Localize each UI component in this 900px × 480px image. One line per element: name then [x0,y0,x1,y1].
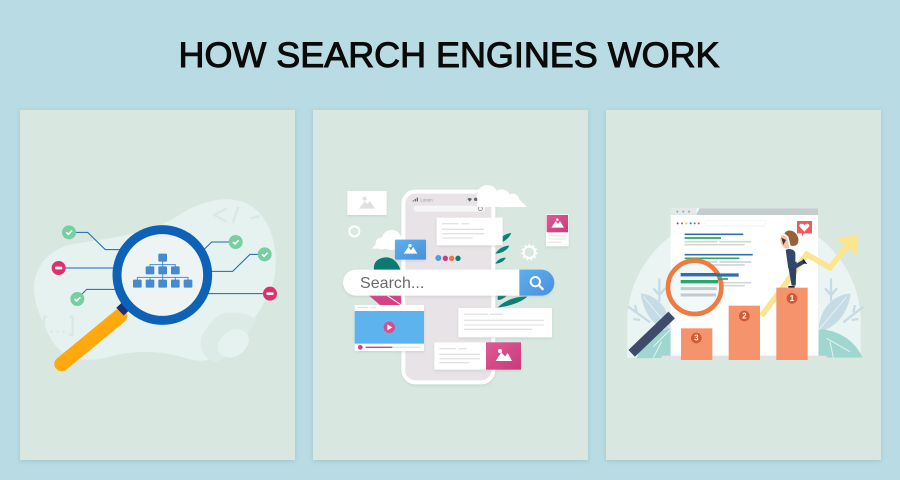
phone [403,192,493,382]
title: HOW SEARCH ENGINES WORK [178,35,720,75]
magnifying glass [632,261,739,353]
bars [681,288,808,360]
leaves and pink shape [368,233,527,307]
panel: search interface [313,110,588,460]
search icon [531,277,543,290]
text card right [458,308,552,337]
connector lines [60,232,270,299]
gear [201,313,255,362]
person [780,230,807,288]
growth arrow [762,240,852,316]
illustration: ranking podium and browser [627,208,863,360]
rank badges: 3 [694,334,699,343]
text and pink image card bottom [434,342,521,370]
leaves left [628,278,671,358]
panel: ranking results [606,110,881,460]
hierarchy chart [133,254,192,288]
illustration: phone with search bar [343,185,569,382]
code bracket marks [44,207,260,335]
bottom browser shadow [662,356,827,359]
cloud left [372,230,405,250]
gear icon [522,245,537,260]
phone status: Lorem [420,198,433,203]
result lines [685,234,753,286]
rank badges [691,293,797,343]
heart bubble [797,221,812,236]
rank badges: 2 [742,312,747,321]
leaves right [819,278,863,358]
text card top [437,218,503,245]
minus badges [52,261,277,301]
check badges [62,225,272,306]
handle [62,316,120,364]
lens [117,230,208,320]
cloud top right [477,185,527,207]
browser window [671,208,818,358]
semicircle backdrop [627,212,861,358]
search bar: Search... [360,275,424,292]
ring [349,226,359,236]
rank badges: 1 [790,294,795,303]
colour dots [435,255,461,261]
image card top-left [347,191,387,215]
illustration: site structure under magnifying glass [34,199,277,364]
video card [355,305,424,351]
pink image card right [546,214,569,246]
phone status [413,198,485,212]
panel: crawling magnifier [20,110,295,460]
blue image card [395,240,426,260]
search bar [343,270,554,296]
background blob [34,199,276,361]
